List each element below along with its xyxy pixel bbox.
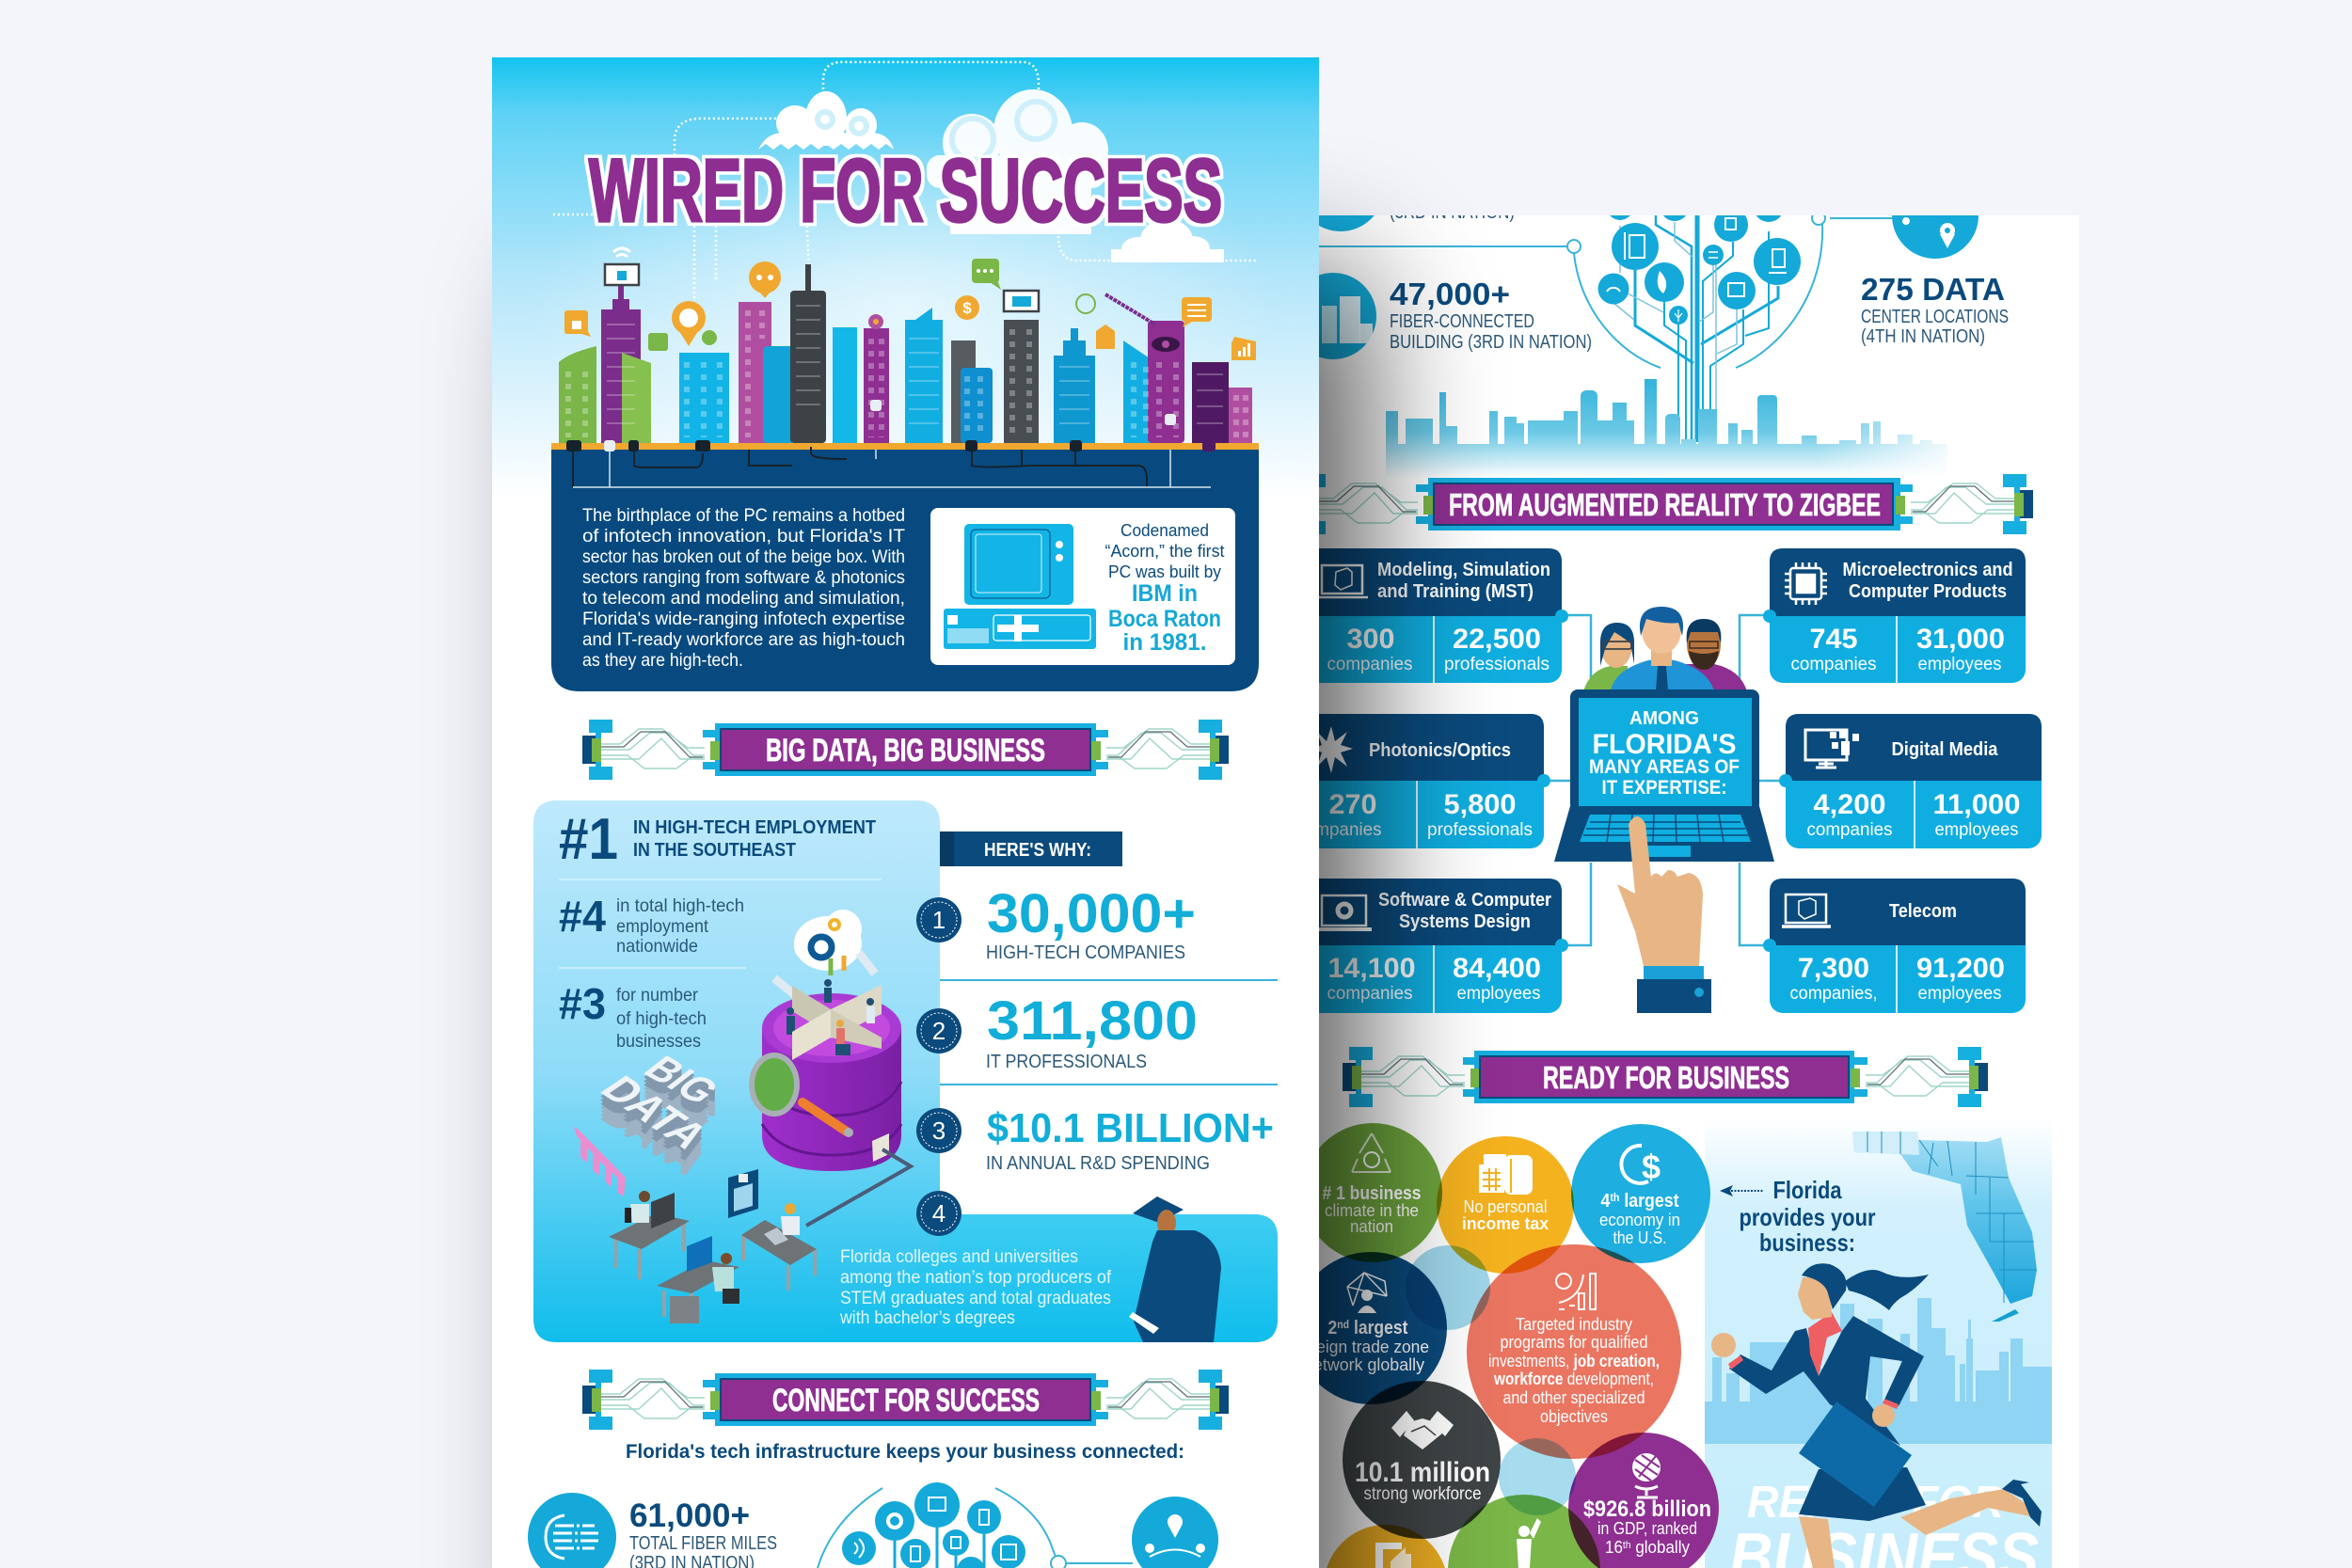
stat 3: R&D spending bbox=[916, 1105, 1274, 1174]
desks and workers bbox=[609, 1191, 817, 1323]
stat 1: companies bbox=[916, 883, 1196, 963]
stat: total fiber miles: 61,000+ bbox=[629, 1497, 750, 1534]
text: graduates: Florida colleges and universities bbox=[840, 1247, 1078, 1267]
stat: data centers: (4TH IN NATION) bbox=[1861, 326, 1985, 347]
stat 2: professionals bbox=[916, 990, 1198, 1072]
icon: laptop cube bbox=[1317, 565, 1368, 597]
text: industry programs: and other specialized bbox=[1503, 1388, 1645, 1407]
card: telecom bbox=[1763, 879, 2026, 1013]
cubicles with workers bbox=[787, 979, 882, 1060]
stepped blue tower bbox=[1054, 328, 1095, 443]
card: software bbox=[1279, 879, 1568, 1013]
callout: first PC: IBM in bbox=[1132, 580, 1198, 607]
card: software: Systems Design bbox=[1399, 911, 1531, 932]
card: digital media: 4,200 bbox=[1814, 789, 1885, 820]
icon: map pin circle bbox=[1892, 215, 1979, 259]
cyan tower bbox=[833, 327, 857, 443]
callout: first PC: Boca Raton bbox=[1108, 606, 1221, 632]
text: workforce: 10.1 million bbox=[1355, 1457, 1490, 1488]
magnifying glass bbox=[752, 1055, 853, 1137]
blue rounded tower bbox=[763, 346, 796, 443]
text: GDP: $926.8 billion bbox=[1583, 1497, 1711, 1522]
magenta block bbox=[1229, 388, 1252, 443]
soft shadow of front page bbox=[564, 273, 1364, 1568]
card: telecom: companies, bbox=[1789, 984, 1878, 1004]
card: digital media: Digital Media bbox=[1891, 739, 1998, 760]
text: trade zone: 2 bbox=[1328, 1318, 1339, 1338]
rank: #1 bbox=[559, 807, 876, 872]
banner: from augmented reality to zigbee: FROM AUGMENTED REALITY TO ZIGBEE bbox=[1449, 487, 1881, 522]
banner: ready for business: READY FOR BUSINESS bbox=[1543, 1060, 1789, 1095]
text: graduates: among the nation’s top producers of bbox=[840, 1268, 1112, 1288]
text: total fiber miles cut-off: (3RD IN NATION) bbox=[1390, 202, 1515, 223]
banner: connect for success bbox=[582, 1370, 1229, 1430]
text: graduates bbox=[839, 1247, 1112, 1328]
stat 3: R&D spending: IN ANNUAL R&D SPENDING bbox=[986, 1153, 1210, 1174]
floppy disk bbox=[728, 1169, 758, 1218]
stat 1: companies: 30,000+ bbox=[987, 883, 1196, 944]
card: software: Software & Computer bbox=[1378, 890, 1551, 911]
circle: yellow lower bbox=[1324, 1525, 1448, 1568]
heading bar: here's why: HERE'S WHY: bbox=[984, 840, 1091, 861]
card: microelectronics: employees bbox=[1917, 655, 2002, 674]
stat: fiber-connected buildings: FIBER-CONNECTED bbox=[1390, 311, 1534, 332]
slanted cyan tower bbox=[1123, 341, 1155, 443]
card: modeling simulation: and Training (MST) bbox=[1377, 581, 1534, 602]
intro navy panel bbox=[551, 400, 1259, 691]
pointing hand bbox=[1617, 816, 1711, 1013]
card: modeling simulation: professionals bbox=[1444, 655, 1549, 674]
big white background words: READY FOR bbox=[1747, 1478, 2004, 1528]
gray tower with monitor bbox=[1004, 291, 1039, 443]
rank: #1: #1 bbox=[559, 807, 618, 872]
yellow strip bbox=[551, 443, 1259, 451]
card: software: 84,400 bbox=[1453, 953, 1541, 984]
banner: big data, big business bbox=[582, 720, 1229, 780]
card: software: employees bbox=[1456, 984, 1541, 1004]
divider bbox=[940, 980, 1278, 1085]
stat 1: companies: HIGH-TECH COMPANIES bbox=[986, 942, 1185, 963]
crane bbox=[1105, 294, 1155, 325]
rank: #4: in total high-tech bbox=[616, 896, 744, 916]
running businesswoman bbox=[1711, 1263, 2042, 1568]
banner: from augmented reality to zigbee bbox=[1295, 474, 2033, 534]
text: economy bbox=[1599, 1146, 1680, 1247]
magenta tower bbox=[739, 302, 771, 443]
banner: ready for business bbox=[1343, 1047, 1988, 1107]
heading bar: here's why bbox=[940, 832, 1122, 866]
banner: connect for success: CONNECT FOR SUCCESS bbox=[772, 1383, 1040, 1418]
lower band bbox=[809, 1214, 1278, 1342]
laptop with heading: AMONG bbox=[1629, 708, 1699, 729]
arrow head bbox=[1720, 1185, 1733, 1196]
rank: #4: employment bbox=[616, 917, 709, 937]
card: digital media: employees bbox=[1934, 820, 2019, 840]
callout: first PC: “Acorn,” the first bbox=[1104, 542, 1225, 561]
cloud gears bbox=[818, 102, 1055, 160]
banner: big data, big business: BIG DATA, BIG BUSINESS bbox=[766, 733, 1045, 768]
text: workforce bbox=[1355, 1411, 1490, 1504]
text: trade zone: largest bbox=[1349, 1318, 1408, 1338]
intro paragraph: sectors ranging from software & photonics bbox=[582, 568, 905, 588]
heading: Florida provides your business: provides your bbox=[1739, 1203, 1876, 1231]
icons in lower circles bbox=[1375, 1518, 1541, 1568]
callout: first PC bbox=[930, 508, 1235, 665]
card: software: companies bbox=[1327, 984, 1413, 1004]
text: business climate: climate in the bbox=[1325, 1201, 1419, 1220]
background skyline bbox=[1705, 1298, 2052, 1444]
title: WIRED FOR SUCCESS bbox=[589, 141, 1222, 241]
rank: #3: for number bbox=[616, 986, 699, 1006]
stat 2: professionals: IT PROFESSIONALS bbox=[986, 1052, 1147, 1072]
network cable bbox=[806, 1133, 911, 1226]
text: industry programs bbox=[1488, 1274, 1660, 1426]
text: GDP bbox=[1583, 1453, 1711, 1557]
stat: total fiber miles bbox=[528, 1493, 777, 1568]
text: economy: economy in bbox=[1599, 1211, 1680, 1229]
intro paragraph bbox=[582, 506, 905, 671]
card: photonics: companies bbox=[1296, 820, 1381, 840]
icon: microchip bbox=[1785, 562, 1827, 605]
rank: #4 bbox=[559, 879, 882, 957]
card: microelectronics: Computer Products bbox=[1849, 581, 2007, 602]
blue block bbox=[961, 368, 993, 443]
right infographic page bbox=[1279, 145, 2079, 1568]
circle: green lower bbox=[1448, 1495, 1600, 1568]
plugs and wiring bbox=[573, 447, 1147, 487]
rank: #3: #3 bbox=[559, 979, 606, 1028]
rank: #3: of high-tech bbox=[616, 1009, 707, 1029]
dotted circuit lines bbox=[553, 62, 1257, 301]
purple eye tower bbox=[1148, 321, 1184, 443]
circle: business climate bbox=[1303, 1123, 1442, 1262]
technology tree top bbox=[818, 1482, 1056, 1568]
intro paragraph: sector has broken out of the beige box. With bbox=[582, 547, 905, 567]
text: business climate bbox=[1323, 1133, 1421, 1236]
circle: workforce bbox=[1343, 1381, 1501, 1539]
circle: pale accent bbox=[1406, 1245, 1490, 1330]
card: telecom: Telecom bbox=[1889, 901, 1957, 922]
card: microelectronics: 31,000 bbox=[1916, 624, 2005, 655]
header sky bbox=[492, 57, 1319, 499]
isometric 3D words: BIG bbox=[634, 1049, 728, 1111]
floating icons bbox=[564, 259, 1256, 360]
purple tower bbox=[601, 248, 641, 443]
heading: Florida provides your business: business: bbox=[1759, 1228, 1855, 1257]
rank: #4: #4 bbox=[559, 892, 606, 941]
skyline fade bbox=[1828, 421, 1947, 474]
icon: laptop gear bbox=[1317, 895, 1372, 929]
left infographic page bbox=[492, 57, 1319, 1568]
icon: laptop cube bbox=[1782, 895, 1831, 927]
text: industry programs: Targeted industry bbox=[1516, 1315, 1632, 1334]
icon: building bbox=[1319, 273, 1376, 359]
stat: data centers: 275 DATA bbox=[1861, 272, 2005, 307]
laptop with heading: MANY AREAS OF bbox=[1589, 756, 1740, 778]
text: income tax bbox=[1462, 1154, 1549, 1233]
text: economy: the U.S. bbox=[1613, 1228, 1667, 1247]
overlapping circles of benefits bbox=[1295, 1123, 1719, 1568]
text: GDP: in GDP, ranked bbox=[1597, 1519, 1697, 1538]
text: trade zone bbox=[1297, 1273, 1429, 1374]
card: modeling simulation bbox=[1319, 548, 1568, 683]
card: microelectronics: companies bbox=[1791, 655, 1876, 674]
stat: fiber-connected buildings: 47,000+ bbox=[1390, 277, 1510, 311]
clouds bbox=[758, 89, 1224, 262]
icon: location circle bbox=[1132, 1497, 1218, 1568]
card: microelectronics: Microelectronics and bbox=[1842, 560, 2013, 580]
badge 4 bbox=[916, 1191, 961, 1236]
text: business climate: nation bbox=[1350, 1217, 1393, 1236]
text: graduates: with bachelor’s degrees bbox=[839, 1308, 1015, 1328]
icon: monitor bbox=[1805, 730, 1859, 768]
card: modeling simulation: 300 bbox=[1347, 624, 1394, 655]
card: digital media bbox=[1779, 714, 2042, 848]
sky glow bbox=[529, 132, 1281, 489]
text: economy: th bbox=[1610, 1191, 1619, 1204]
text: income tax: No personal bbox=[1464, 1197, 1547, 1216]
intro paragraph: The birthplace of the PC remains a hotbed bbox=[582, 506, 905, 526]
rank: #3 bbox=[559, 968, 746, 1052]
text: business climate: # 1 business bbox=[1323, 1183, 1421, 1204]
heading: Florida provides your business: Florida bbox=[1772, 1176, 1842, 1204]
keyboard bbox=[1580, 815, 1751, 842]
laptop with heading: IT EXPERTISE: bbox=[1601, 777, 1727, 799]
card: software: 14,100 bbox=[1328, 953, 1415, 984]
callout: first PC: in 1981. bbox=[1123, 629, 1206, 656]
purple database cylinder bbox=[762, 993, 901, 1171]
card: telecom: employees bbox=[1917, 984, 2002, 1004]
rank: #4: nationwide bbox=[616, 937, 698, 957]
card: telecom: 7,300 bbox=[1798, 953, 1869, 984]
dark purple tower bbox=[1192, 362, 1229, 443]
building window stripes bbox=[607, 306, 1223, 423]
card: photonics: professionals bbox=[1427, 820, 1533, 840]
intro paragraph: to telecom and modeling and simulation, bbox=[582, 589, 905, 609]
technology tree illustration bbox=[1319, 192, 1893, 442]
intro paragraph: and IT-ready workforce are as high-touch bbox=[582, 630, 905, 650]
text: economy: $ bbox=[1642, 1148, 1661, 1186]
card: digital media: 11,000 bbox=[1932, 789, 2021, 820]
cyan tall tower bbox=[905, 308, 943, 443]
card: microelectronics: 745 bbox=[1810, 624, 1857, 655]
callout: first PC: Codenamed bbox=[1120, 521, 1209, 540]
stat: total fiber miles: TOTAL FIBER MILES bbox=[629, 1533, 777, 1554]
circle: GDP bbox=[1568, 1433, 1719, 1568]
circle: pale accent lower bbox=[1499, 1438, 1576, 1515]
stat 2: professionals: 311,800 bbox=[987, 990, 1198, 1052]
stat 3: R&D spending: 3 bbox=[932, 1117, 946, 1145]
circle: trade zone bbox=[1295, 1252, 1447, 1404]
Florida map bbox=[1852, 1132, 2037, 1322]
text: trade zone: nd bbox=[1337, 1318, 1349, 1331]
text: trade zone: network globally bbox=[1304, 1355, 1424, 1374]
text: industry programs: objectives bbox=[1540, 1407, 1608, 1426]
panel: Florida provides your business bbox=[1705, 1119, 2052, 1568]
subtitle: Florida's tech infrastructure keeps your business connected: bbox=[626, 1441, 1184, 1463]
stat: fiber-connected buildings bbox=[1290, 273, 1592, 359]
intro paragraph: of infotech innovation, but Florida's IT bbox=[582, 527, 905, 546]
circle: income tax bbox=[1437, 1136, 1574, 1274]
rank: #1: IN HIGH-TECH EMPLOYMENT bbox=[633, 817, 876, 838]
panel: rankings and big data bbox=[533, 800, 1278, 1342]
three IT professionals bbox=[1583, 607, 1747, 691]
isometric 3D words: DATA bbox=[590, 1069, 719, 1155]
stat: data centers: CENTER LOCATIONS bbox=[1861, 307, 2009, 327]
connector node bbox=[1051, 1556, 1066, 1568]
text: GDP: 16 bbox=[1605, 1538, 1624, 1557]
card: modeling simulation: 22,500 bbox=[1453, 624, 1541, 655]
stat 3: R&D spending: $10.1 BILLION+ bbox=[987, 1105, 1274, 1151]
card: photonics: Photonics/Optics bbox=[1369, 740, 1511, 761]
dark tower bbox=[790, 264, 826, 443]
text: graduates: STEM graduates and total graduates bbox=[840, 1289, 1111, 1308]
cloud with gears bbox=[774, 910, 875, 995]
card: photonics bbox=[1279, 714, 1550, 848]
intro paragraph: as they are high-tech. bbox=[582, 651, 743, 671]
connector lines between cards and laptop bbox=[1544, 615, 1786, 945]
card: digital media: companies bbox=[1806, 820, 1893, 840]
icon: starburst bbox=[1312, 726, 1353, 773]
stat 1: companies: 1 bbox=[932, 906, 946, 934]
badge 4: 4 bbox=[932, 1199, 946, 1227]
text: industry programs: programs for qualified bbox=[1500, 1333, 1648, 1352]
circle: industry programs bbox=[1467, 1244, 1681, 1459]
text: GDP: th bbox=[1623, 1540, 1631, 1551]
stat: data centers bbox=[1861, 215, 2008, 346]
icon: vintage computer bbox=[944, 524, 1096, 649]
heading: Florida provides your business bbox=[1739, 1176, 1876, 1257]
card: microelectronics bbox=[1763, 548, 2026, 683]
graduate figure bbox=[1129, 1196, 1221, 1342]
green building front bbox=[622, 353, 651, 443]
stat 2: professionals: 2 bbox=[932, 1017, 946, 1045]
card: telecom: 91,200 bbox=[1916, 953, 2005, 984]
card: modeling simulation: companies bbox=[1327, 655, 1413, 674]
text: income tax: income tax bbox=[1462, 1214, 1549, 1233]
purple tower with circle bbox=[864, 314, 889, 443]
circle: economy bbox=[1571, 1124, 1710, 1263]
text: GDP: globally bbox=[1631, 1538, 1690, 1557]
card: modeling simulation: Modeling, Simulation bbox=[1377, 560, 1550, 580]
city skyline illustration bbox=[551, 248, 1259, 451]
rank: #3: businesses bbox=[616, 1032, 701, 1052]
rank: #1: IN THE SOUTHEAST bbox=[633, 840, 796, 861]
floating icons: $ bbox=[962, 299, 972, 317]
laptop with heading bbox=[1554, 689, 1774, 862]
pink bar chart bbox=[574, 1127, 626, 1196]
text: industry programs: investments, job creation, bbox=[1488, 1352, 1660, 1370]
arrow bbox=[1731, 1190, 1764, 1192]
callout: first PC: PC was built by bbox=[1108, 562, 1221, 581]
cyan block bbox=[679, 353, 729, 443]
card: photonics: 270 bbox=[1328, 789, 1377, 820]
icon: fiber bbox=[528, 1493, 616, 1568]
laptop with heading: FLORIDA'S bbox=[1592, 729, 1737, 760]
intro paragraph: Florida's wide-ranging infotech expertise bbox=[582, 610, 905, 629]
text: economy: largest bbox=[1619, 1191, 1679, 1212]
green building bbox=[559, 346, 596, 443]
gray tower bbox=[951, 341, 976, 443]
circle icon: fiber cut-off bbox=[1319, 215, 1375, 231]
skyline bbox=[1386, 379, 1947, 478]
card: photonics: 5,800 bbox=[1443, 789, 1517, 820]
stat connector bbox=[1066, 1562, 1133, 1564]
text: economy: 4 bbox=[1601, 1191, 1612, 1212]
text: trade zone: foreign trade zone bbox=[1297, 1338, 1429, 1356]
stat: fiber-connected buildings: BUILDING (3RD IN NATION) bbox=[1390, 332, 1592, 353]
text: industry programs: workforce development, bbox=[1493, 1370, 1654, 1388]
text: workforce: strong workforce bbox=[1364, 1484, 1481, 1504]
